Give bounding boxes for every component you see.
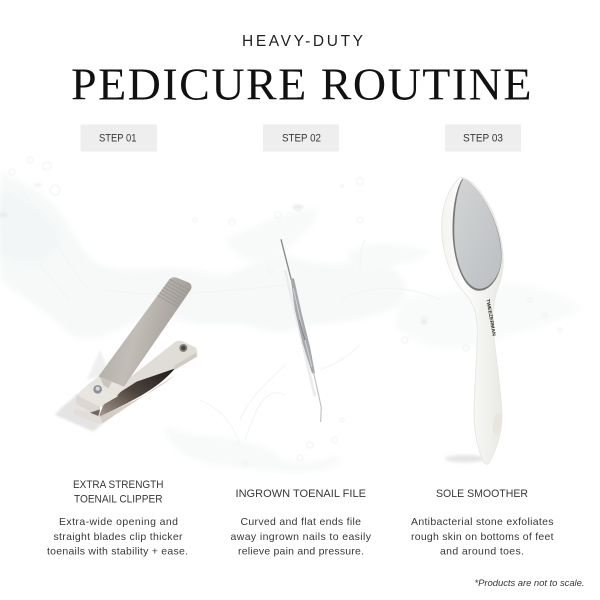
- file curved tip: [313, 372, 321, 422]
- clipper pivot pin: [93, 385, 102, 394]
- heading: heavy-duty: HEAVY-DUTY: [242, 33, 363, 50]
- clipper lower arm: [93, 341, 197, 412]
- clipper lever: [98, 277, 191, 387]
- footnote: *Products are not to scale.: [474, 578, 584, 589]
- step 02 label: STEP 02: [282, 132, 321, 144]
- text: clipper heading: [73, 479, 164, 506]
- text: clipper description: toenails with stability + ease.: [47, 546, 188, 558]
- step 01 label: [80, 124, 157, 152]
- text: smoother description: rough skin on bottoms of feet: [411, 531, 554, 543]
- text: smoother heading: SOLE SMOOTHER: [436, 488, 528, 500]
- text: file description: away ingrown nails to easily: [230, 531, 372, 543]
- clipper pivot plate: [86, 377, 125, 396]
- handle hole: [492, 413, 503, 435]
- text: clipper heading: EXTRA STRENGTH: [73, 479, 164, 491]
- file shaft: [291, 278, 315, 373]
- text: file heading: INGROWN TOENAIL FILE: [236, 488, 366, 500]
- text: file description: Curved and flat ends file: [240, 516, 361, 528]
- text: clipper heading: TOENAIL CLIPPER: [74, 494, 163, 506]
- text: clipper description: Extra-wide opening and: [59, 516, 178, 528]
- smoother shadow: [445, 455, 485, 462]
- step 02 label: [263, 124, 339, 152]
- water splash background: [0, 157, 582, 472]
- clipper front block: [77, 386, 118, 407]
- brand mark: TWEEZERMAN: [485, 299, 497, 337]
- step 03 label: [445, 124, 521, 152]
- product: sole smoother: [442, 177, 503, 464]
- file thin end: [281, 239, 291, 280]
- clipper rivet: [179, 344, 187, 352]
- title: pedicure routine: PEDICURE ROUTINE: [71, 58, 532, 110]
- text: file description: relieve pain and pressure.: [238, 546, 364, 558]
- product: toenail clipper: [55, 277, 197, 432]
- clipper shadow: [55, 393, 103, 432]
- smoother handle and head: [442, 177, 503, 464]
- clipper jaw opening: [98, 369, 175, 417]
- smoother abrasive pad: [452, 179, 502, 291]
- text: smoother description: and around toes.: [440, 546, 524, 558]
- text: file description: [230, 516, 372, 558]
- step 01 label: STEP 01: [99, 132, 136, 144]
- text: smoother description: Antibacterial stone exfoliates: [411, 516, 554, 528]
- product: ingrown toenail file: [281, 239, 321, 422]
- step 03 label: STEP 03: [463, 132, 503, 144]
- text: clipper description: [47, 516, 188, 558]
- text: clipper description: straight blades clip thicker: [54, 531, 183, 543]
- text: smoother description: [411, 516, 554, 558]
- file shadow: [285, 270, 315, 397]
